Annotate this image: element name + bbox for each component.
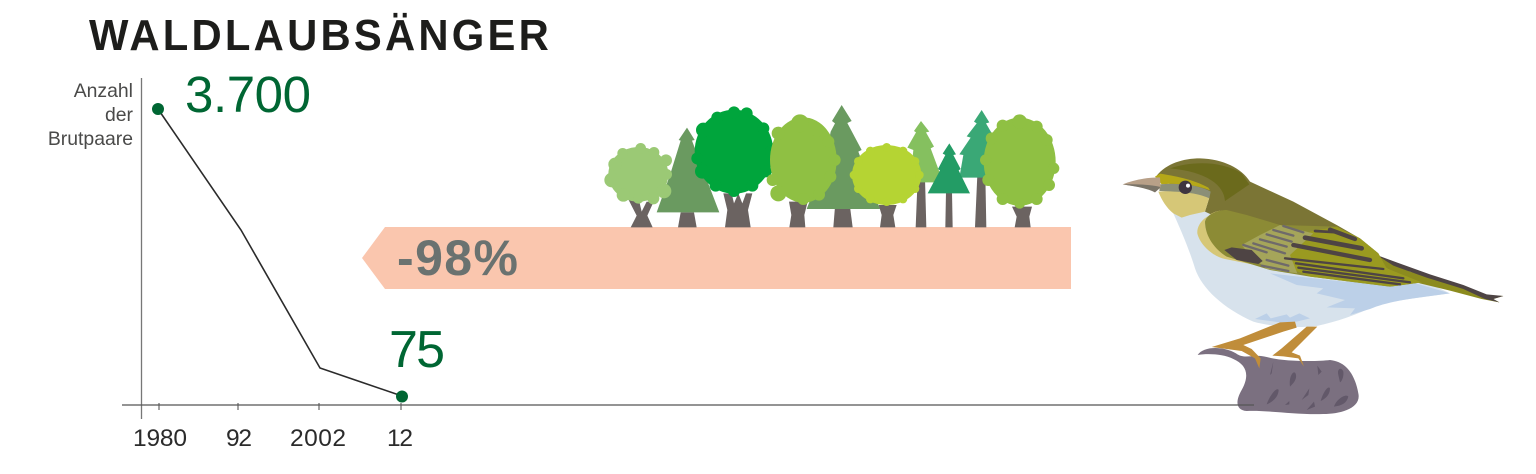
- tree 1: [604, 143, 672, 227]
- flight feathers: [1285, 230, 1410, 284]
- decline arrow: [362, 227, 1071, 289]
- tree 5: [850, 143, 924, 227]
- conifer big: [807, 105, 880, 227]
- line chart: [133, 78, 413, 452]
- title: WALDLAUBSÄNGER: [89, 11, 549, 60]
- y axis label: der: [105, 104, 134, 126]
- arrow percentage: -98%: [397, 230, 518, 286]
- dark wing patch: [1224, 247, 1263, 264]
- tree 4: [767, 114, 841, 227]
- lower beak: [1123, 184, 1161, 192]
- y axis label: [48, 80, 134, 150]
- year labels: [133, 425, 413, 452]
- value: 3.700: 3.700: [185, 66, 311, 123]
- year labels: 1980: [133, 425, 187, 452]
- flight feather area: [1287, 227, 1422, 287]
- crown: [1170, 163, 1249, 201]
- cheek: [1158, 191, 1209, 218]
- belly shading: [1255, 273, 1450, 322]
- year labels: 92: [226, 425, 252, 452]
- year labels: 2002: [290, 425, 346, 452]
- start point: [152, 103, 164, 115]
- eye: [1179, 181, 1192, 194]
- conifer dark: [928, 143, 970, 227]
- y axis label: Anzahl: [74, 80, 133, 102]
- conifer light: [907, 121, 943, 227]
- wing edge: [1197, 210, 1263, 267]
- tail: [1377, 255, 1503, 302]
- conifer teal: [959, 110, 1000, 227]
- back and head: [1157, 158, 1378, 260]
- y axis label: Brutpaare: [48, 128, 133, 150]
- conifer 2: [657, 128, 719, 227]
- tree big right: [980, 114, 1059, 227]
- x axis: [122, 404, 1254, 406]
- eye stripe: [1155, 174, 1210, 190]
- tree 3: [691, 106, 777, 227]
- covert stripes: [1243, 226, 1303, 271]
- belly: [1173, 208, 1450, 327]
- rock: [1198, 348, 1359, 414]
- wing coverts: [1242, 225, 1313, 273]
- end point: [396, 390, 408, 402]
- bird on rock: [1123, 158, 1503, 414]
- year ticks: [159, 403, 401, 410]
- forest illustration: [604, 105, 1059, 227]
- trend line: [158, 109, 402, 396]
- value: 75: 75: [389, 321, 445, 379]
- y axis: [140, 78, 142, 419]
- wing: [1205, 210, 1422, 287]
- beak: [1123, 177, 1161, 192]
- legs and feet: [1212, 322, 1317, 368]
- year labels: 12: [387, 425, 413, 452]
- grey stripe: [1159, 184, 1211, 198]
